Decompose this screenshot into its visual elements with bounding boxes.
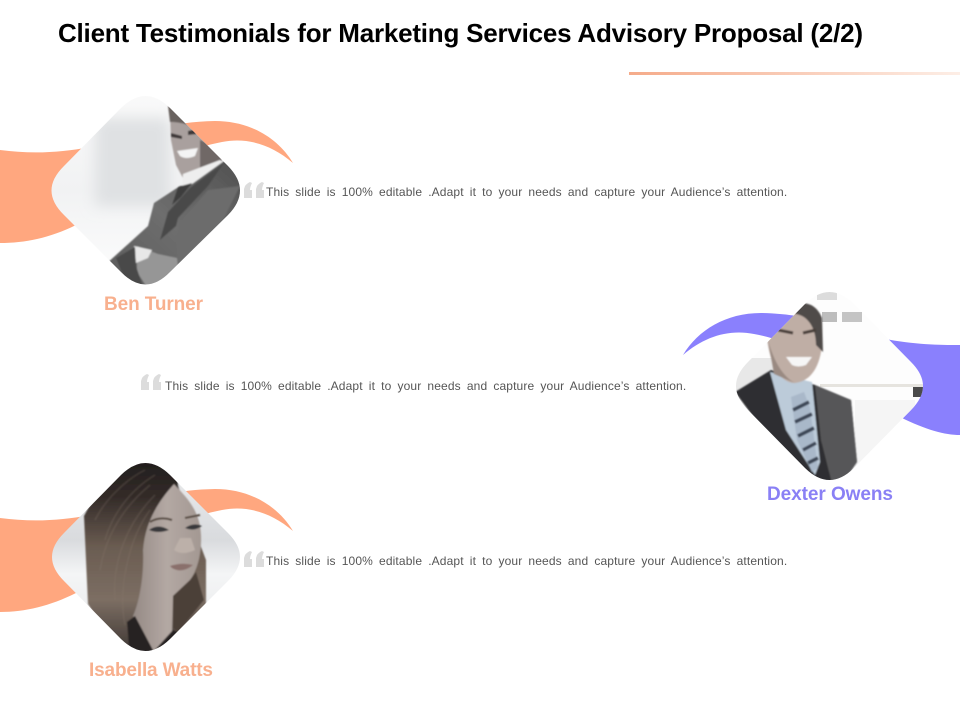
name: Isabella Watts: Isabella Watts (89, 660, 213, 681)
testimonial text: This slide is 100% editable .Adapt it to your needs and capture your Audience’s attention. (266, 554, 787, 568)
panel: Ben Turner testimonial (0, 106, 786, 310)
portrait: Ben Turner (52, 106, 240, 284)
name: Ben Turner: Ben Turner (104, 294, 204, 315)
portrait: Dexter Owens (736, 292, 923, 480)
portrait: Isabella Watts (52, 463, 240, 651)
quote mark (244, 182, 264, 198)
quote mark (244, 551, 264, 567)
orange swoosh (0, 489, 293, 612)
header accent rule (629, 72, 960, 75)
quote mark (141, 374, 161, 390)
name: Dexter Owens: Dexter Owens (767, 484, 893, 505)
orange swoosh (0, 121, 293, 243)
testimonial text: This slide is 100% editable .Adapt it to your needs and capture your Audience’s attention. (266, 185, 787, 199)
panel: Isabella Watts testimonial (0, 451, 787, 681)
panel: Dexter Owens testimonial (141, 280, 960, 505)
testimonial text: This slide is 100% editable .Adapt it to your needs and capture your Audience’s attention. (165, 379, 686, 393)
purple swoosh (683, 313, 960, 435)
title: Client Testimonials for Marketing Services Advisory Proposal (2/2) (58, 18, 863, 48)
